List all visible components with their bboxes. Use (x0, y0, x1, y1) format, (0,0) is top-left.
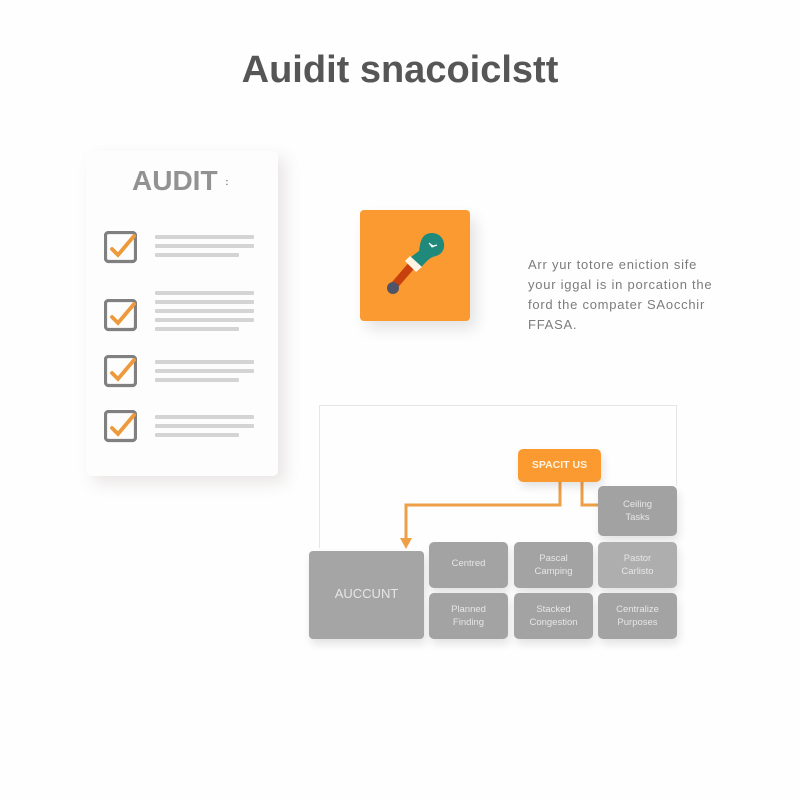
text block: FFASA. (528, 317, 577, 332)
icon: checkbox (104, 231, 137, 264)
orange status box (518, 449, 601, 482)
item text lines (155, 235, 254, 257)
box: row 1 column 3 (598, 542, 677, 588)
box: row 2 column 2: Congestion (529, 617, 578, 628)
box: row 2 column 3: Centralize (616, 604, 659, 615)
checklist item 2 (104, 291, 254, 332)
icon: checkbox (104, 355, 137, 388)
item text lines (155, 360, 254, 382)
panel heading: AUDIT : (132, 165, 228, 196)
orange status box: SPACIT US (532, 459, 587, 471)
box: row 1 column 3: Carlisto (621, 566, 654, 577)
box: row 1 column 2: Camping (534, 566, 573, 577)
box: account: AUCCUNT (335, 586, 398, 600)
item text lines (155, 415, 254, 437)
box: row 1 column 1 (429, 542, 508, 588)
checklist item 3 (104, 355, 254, 388)
text block: your iggal is in porcation the (528, 277, 712, 292)
box: row 2 column 3: Purposes (617, 617, 658, 628)
item text lines (155, 291, 254, 331)
box: row 2 column 1: Finding (453, 617, 484, 628)
box: account (309, 551, 424, 639)
arrow: connector to side box (580, 482, 598, 506)
box: row 1 column 3: Pastor (624, 553, 651, 564)
text block: ford the compater SAocchir (528, 297, 705, 312)
box: side task: Ceiling (623, 499, 652, 510)
text block (528, 257, 712, 332)
checklist item 4 (104, 410, 254, 442)
arrow: connector to account (400, 482, 562, 549)
box: side task: Tasks (625, 512, 650, 523)
box: side task (598, 486, 677, 536)
icon: orange tile with tool (360, 210, 470, 321)
box: row 2 column 2: Stacked (536, 604, 571, 615)
box: row 2 column 3 (598, 593, 677, 639)
panel: audit checklist (86, 151, 278, 476)
box: row 1 column 2: Pascal (539, 553, 568, 564)
icon: checkbox (104, 299, 137, 332)
box: row 1 column 1: Centred (452, 558, 485, 569)
box: row 2 column 2 (514, 593, 593, 639)
box: row 2 column 1 (429, 593, 508, 639)
text block: Arr yur totore eniction sife (528, 257, 697, 272)
title: Auidit snacoiclstt (242, 49, 558, 91)
box: row 2 column 1: Planned (451, 604, 486, 615)
box: row 1 column 2 (514, 542, 593, 588)
icon: checkbox (104, 410, 137, 442)
checklist item 1 (104, 231, 254, 264)
